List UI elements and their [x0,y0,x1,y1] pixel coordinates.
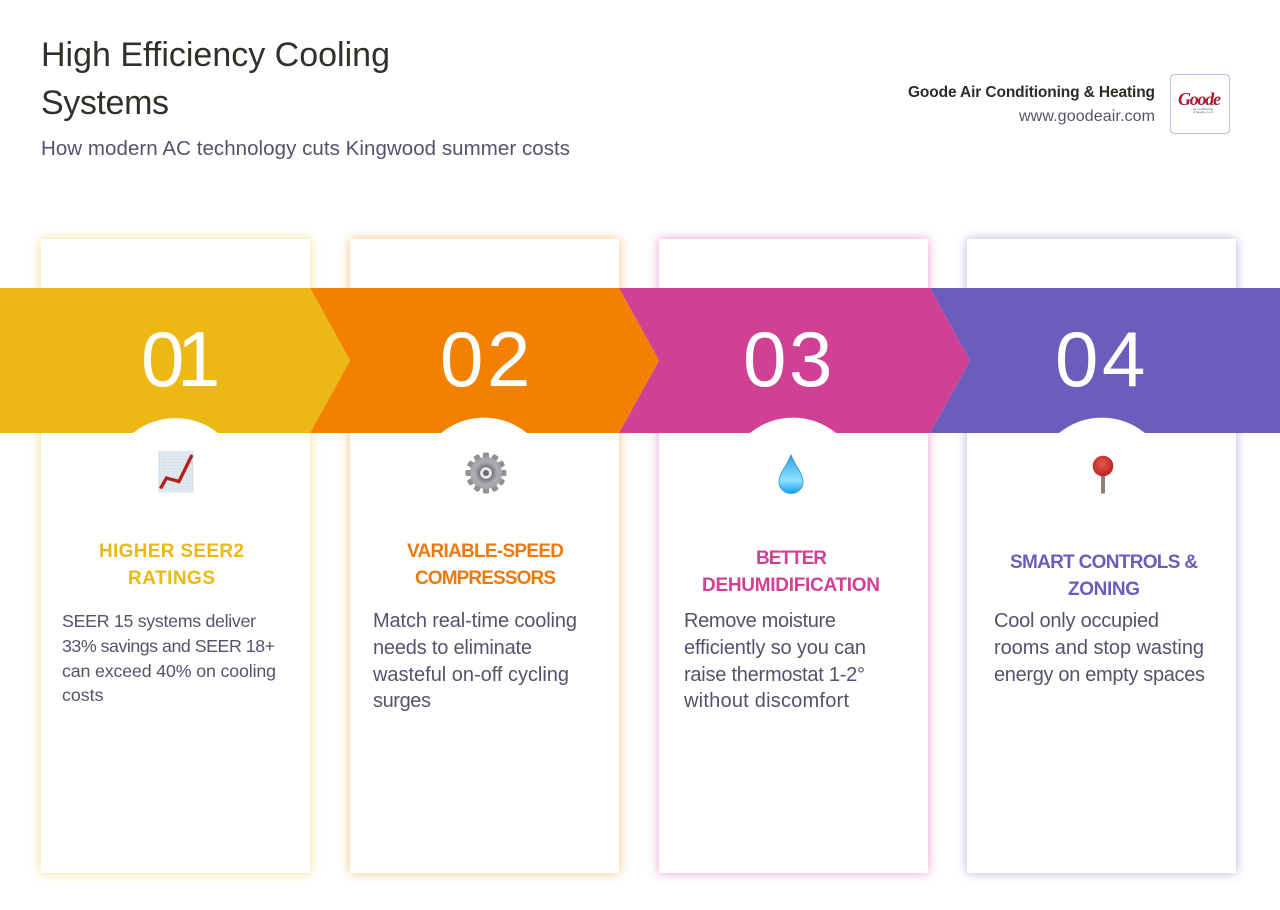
text: card 3: without discomfort [683,690,849,712]
company logo: & heating, LLC [1193,110,1214,114]
number 03: 03 [743,315,832,403]
subtitle: How modern AC technology cuts Kingwood summer costs [41,137,570,160]
arrow 1 [0,288,350,433]
text: card 1: RATINGS [128,568,215,589]
number 01: 01 [141,315,220,403]
notch 1 [133,418,218,433]
text: card 1: costs [62,685,104,705]
arrow 4 [930,288,1280,433]
company details: Goode Air Conditioning & Heating [908,84,1155,101]
arrow 2 [310,288,659,433]
text: card 2: Match real-time cooling [373,610,577,632]
panel: card 3 [659,239,928,873]
text: card 4: energy on empty spaces [994,664,1205,686]
text: card 4 [994,552,1205,686]
icon: pin [1093,456,1113,494]
panel: card 4 [967,239,1236,873]
title: High Efficiency Cooling [41,36,390,74]
company logo [1170,74,1230,134]
title [41,36,390,122]
text: card 4: ZONING [1068,579,1140,600]
text: card 4: Cool only occupied [994,610,1159,632]
text: card 4: SMART CONTROLS & [1010,552,1198,573]
text: card 2: surges [373,690,431,712]
text: card 1: SEER 15 systems deliver [62,611,256,631]
company details [908,84,1155,125]
title: Systems [41,84,169,122]
text: card 3: BETTER [756,548,827,569]
notch 4 [1059,418,1145,433]
icon: chart [158,451,194,492]
number 04: 04 [1055,315,1145,403]
text: card 2: COMPRESSORS [415,568,556,589]
text: card 1: 33% savings and SEER 18+ [62,636,275,656]
notch 3 [750,418,836,433]
text: card 3 [683,548,880,712]
text: card 2: wasteful on-off cycling [372,664,569,686]
company details: www.goodeair.com [1018,108,1155,125]
panel: card 1 [41,239,310,873]
arrow 3 [619,288,970,433]
text: card 1: can exceed 40% on cooling [62,661,276,681]
company logo: Goode [1178,89,1221,109]
text: card 2 [372,541,577,712]
company logo: air conditioning [1193,107,1213,111]
text: card 2: VARIABLE-SPEED [407,541,564,562]
icon: gear [466,452,506,494]
text: card 3: efficiently so you can [684,637,866,659]
text: card 3: Remove moisture [684,610,836,632]
text: card 2: needs to eliminate [373,637,532,659]
number 02: 02 [440,315,530,403]
panel: card 2 [350,239,619,873]
text: card 4: rooms and stop wasting [994,637,1204,659]
text: card 3: raise thermostat 1-2° [684,664,865,686]
text: card 1 [62,541,276,705]
text: card 3: DEHUMIDIFICATION [702,575,880,596]
text: card 1: HIGHER SEER2 [99,541,244,562]
icon: water drop [779,455,803,494]
notch 2 [441,418,527,433]
